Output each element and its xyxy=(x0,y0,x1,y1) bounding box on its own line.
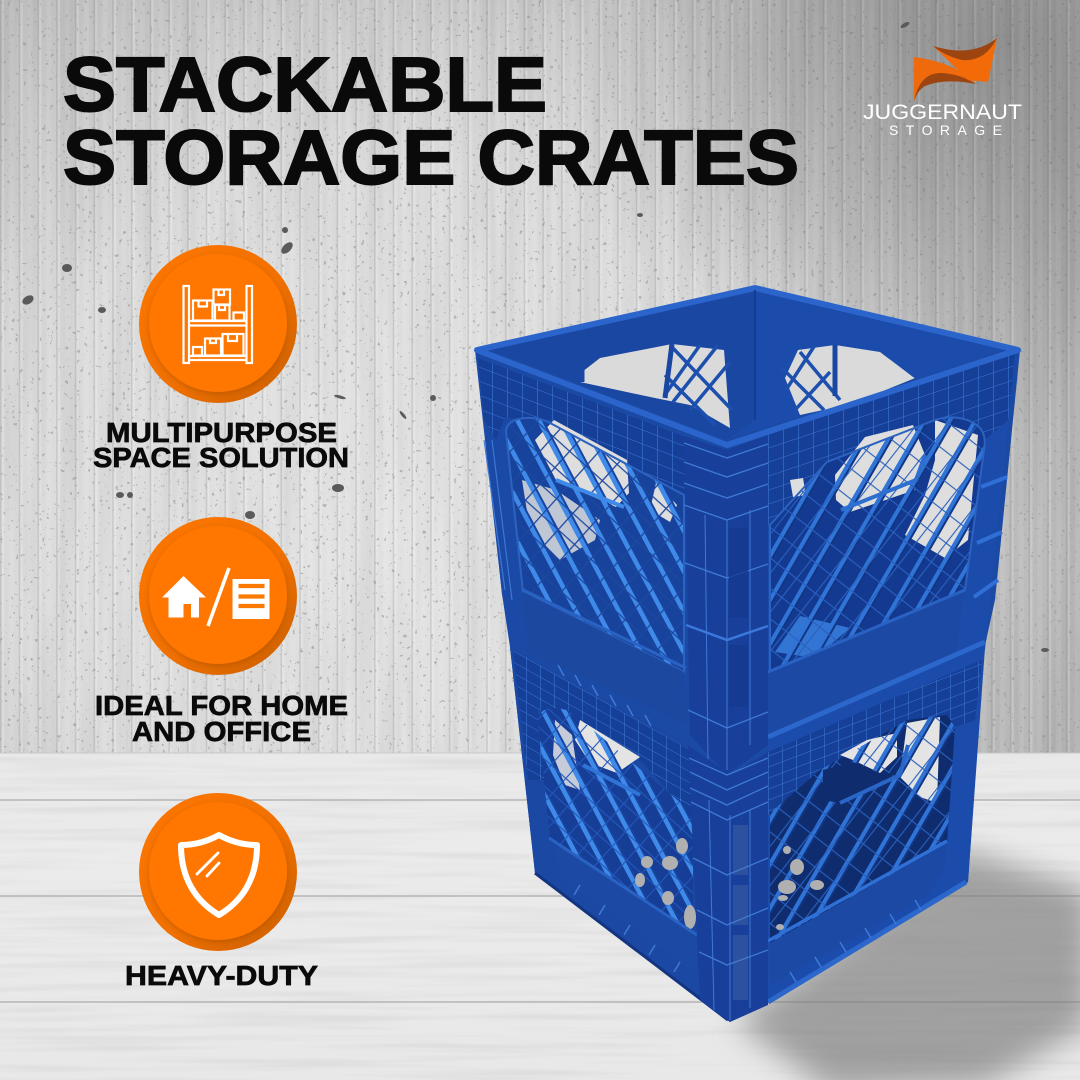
label: heavy-duty: HEAVY-DUTY xyxy=(125,960,318,991)
icon badge: warehouse shelves xyxy=(139,245,297,403)
openings through the left window xyxy=(535,420,629,507)
icon badge: house and document xyxy=(139,517,297,675)
see-through openings xyxy=(580,344,730,428)
label: ideal for home and office: IDEAL FOR HOME xyxy=(95,690,348,721)
crate silhouette xyxy=(475,287,1020,1022)
logo: Juggernaut Storage: STORAGE xyxy=(889,122,1002,138)
logo: Juggernaut Storage xyxy=(863,38,1022,138)
background: concrete wall xyxy=(0,0,1080,760)
background: wooden floor xyxy=(0,753,1080,1080)
feature: multipurpose space solution xyxy=(93,245,349,473)
icon badge: shield xyxy=(139,793,297,951)
openings through the lower-left window xyxy=(575,720,640,773)
label: ideal for home and office: AND OFFICE xyxy=(132,716,311,747)
title xyxy=(63,42,799,201)
feature: heavy-duty xyxy=(125,793,318,991)
openings through the right window xyxy=(835,425,925,512)
feature: ideal for home and office xyxy=(95,517,348,747)
floor gaps xyxy=(635,838,696,929)
crate floor shadow xyxy=(735,850,1080,1080)
lower crate right face xyxy=(768,648,985,1003)
title: STORAGE CRATES xyxy=(63,115,799,201)
lower crate left face xyxy=(510,647,728,1020)
lower crate front corner xyxy=(688,745,768,1022)
logo: Juggernaut Storage: JUGGERNAUT xyxy=(863,101,1022,124)
upper crate interior xyxy=(490,292,1004,440)
upper crate left face xyxy=(477,354,688,725)
upper crate rim xyxy=(477,288,1018,445)
label panel xyxy=(768,590,965,735)
upper crate front corner xyxy=(684,435,768,775)
label: multipurpose space solution xyxy=(93,417,349,473)
label: multipurpose space solution: MULTIPURPOSE xyxy=(106,417,337,448)
label panel xyxy=(523,592,688,725)
label: ideal for home and office xyxy=(95,690,348,747)
title: STACKABLE xyxy=(63,42,547,128)
label panel xyxy=(552,840,698,975)
label: multipurpose space solution: SPACE SOLUTION xyxy=(93,442,349,473)
product: stacked blue crates xyxy=(475,287,1020,1022)
label panel xyxy=(770,843,947,985)
upper crate right face xyxy=(768,354,1015,750)
